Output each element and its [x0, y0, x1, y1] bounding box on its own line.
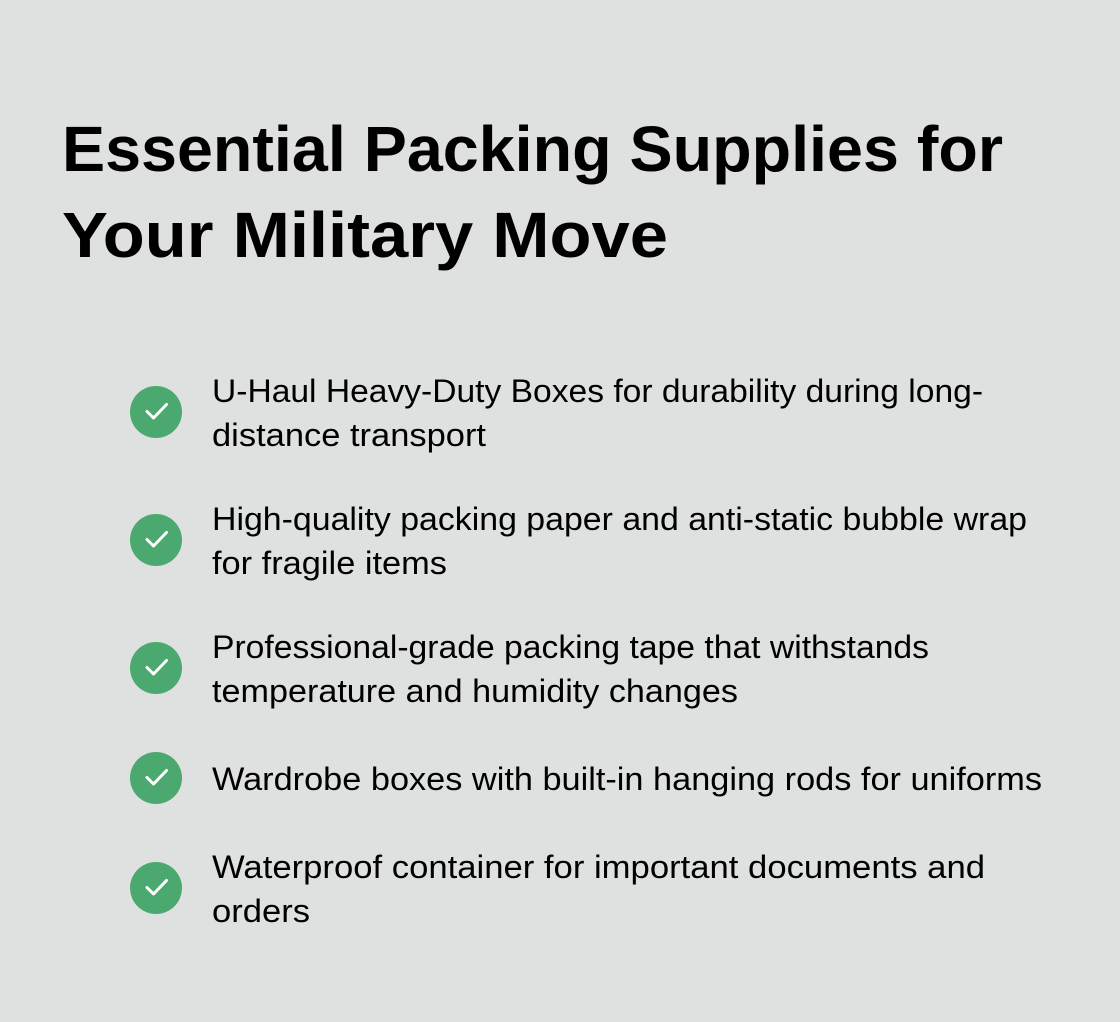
icon: check — [130, 514, 182, 566]
checklist — [130, 373, 1042, 929]
item: packing tape — [130, 629, 929, 709]
item text: temperature and humidity changes — [212, 673, 738, 709]
item text: orders — [212, 893, 310, 929]
item text: distance transport — [212, 417, 486, 453]
title: Your Military Move — [62, 199, 668, 271]
item text — [212, 501, 1027, 581]
item: paper and bubble wrap — [130, 501, 1027, 581]
item: heavy-duty boxes — [130, 373, 983, 453]
item: wardrobe boxes — [130, 752, 1042, 804]
item text — [212, 849, 985, 929]
item text — [212, 629, 929, 709]
item text: Wardrobe boxes with built-in hanging rods for uniforms — [212, 761, 1042, 797]
item text: for fragile items — [212, 545, 447, 581]
item text — [212, 373, 983, 453]
item text: U-Haul Heavy-Duty Boxes for durability during long- — [212, 373, 983, 409]
item text: Waterproof container for important documents and — [212, 849, 985, 885]
title: Essential Packing Supplies for — [62, 113, 1003, 185]
item: waterproof container — [130, 849, 985, 929]
title — [62, 113, 1003, 271]
icon: check — [130, 386, 182, 438]
item text: High-quality packing paper and anti-static bubble wrap — [212, 501, 1027, 537]
item text: Professional-grade packing tape that withstands — [212, 629, 929, 665]
icon: check — [130, 862, 182, 914]
icon: check — [130, 642, 182, 694]
icon: check — [130, 752, 182, 804]
